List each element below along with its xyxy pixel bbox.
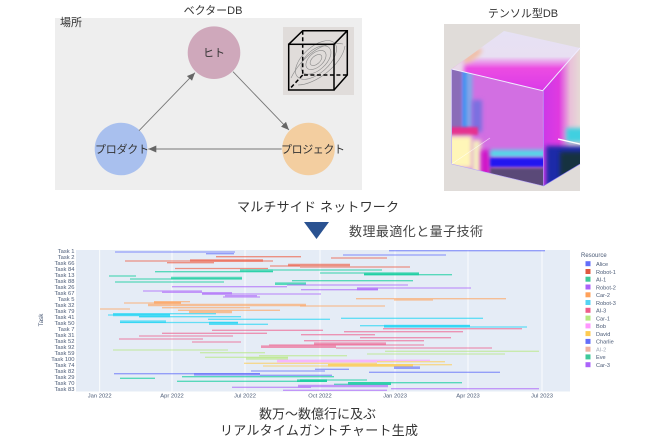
y axis task labels: Task 2 xyxy=(58,255,74,261)
x axis date labels: Oct 2022 xyxy=(308,394,332,400)
label: place: 場所 xyxy=(60,15,82,29)
y axis task labels: Task 1 xyxy=(58,249,74,255)
arrow: project to product xyxy=(148,148,282,150)
bars: Alice xyxy=(115,251,545,255)
y axis task labels: Task 29 xyxy=(55,375,74,381)
y axis task labels: Task 79 xyxy=(55,309,74,315)
y axis task labels: Task 13 xyxy=(55,273,74,279)
image: iridescent glass cube xyxy=(444,24,586,191)
y axis task labels xyxy=(51,249,75,393)
node: person: ヒト xyxy=(203,46,225,60)
text: mathematical optimisation and quantum technology: 数理最適化と量子技術 xyxy=(349,224,483,239)
bars: Robot-1 xyxy=(125,257,410,268)
legend: resource: AI-3 xyxy=(596,309,606,315)
node: project xyxy=(281,123,345,175)
bars: Car-1 xyxy=(113,350,539,358)
chart: gantt xyxy=(38,249,616,400)
bars: Car-3 xyxy=(232,386,539,390)
legend: resource xyxy=(581,253,616,369)
x axis date labels: Jan 2022 xyxy=(88,394,112,400)
x axis date labels: Jul 2023 xyxy=(531,394,553,400)
legend: resource: Robot-1 xyxy=(596,270,616,276)
y axis task labels: Task 5 xyxy=(58,297,74,303)
cube right face xyxy=(542,52,580,186)
bars: Car-2 xyxy=(100,299,506,312)
legend: resource: Alice xyxy=(596,262,608,268)
node: product: プロダクト xyxy=(95,142,149,156)
y axis task labels: Task 59 xyxy=(55,351,74,357)
y axis task labels: Task 50 xyxy=(55,321,74,327)
y axis task labels: Task 100 xyxy=(51,357,74,363)
bars: Bob xyxy=(277,360,430,362)
arrow: down triangle xyxy=(304,222,329,239)
bars: AI-3 xyxy=(119,329,522,348)
cube top face xyxy=(452,31,579,90)
y axis task labels: Task 70 xyxy=(55,381,74,387)
y axis task labels: Task 66 xyxy=(55,261,74,267)
panel: vector DB graph xyxy=(55,15,362,190)
legend: resource: Car-1 xyxy=(596,316,610,322)
caption: scale xyxy=(220,406,418,438)
legend: resource: Bob xyxy=(596,324,606,330)
legend: resource: Charlie xyxy=(596,340,614,346)
x axis date labels: Apr 2023 xyxy=(456,394,480,400)
legend: resource: Eve xyxy=(596,355,606,361)
caption: realtime gantt generation: リアルタイムガントチャート生成 xyxy=(220,423,418,438)
arrow: product to person xyxy=(139,73,195,131)
x axis date labels: Jul 2022 xyxy=(234,394,256,400)
y axis task labels: Task 32 xyxy=(55,303,74,309)
cube front face xyxy=(452,70,543,186)
y axis task labels: Task 7 xyxy=(58,327,74,333)
bars: Robot-2 xyxy=(143,285,471,297)
bars: David xyxy=(244,362,452,366)
y axis task labels: Task 26 xyxy=(55,285,74,291)
legend: resource: Resource xyxy=(581,253,607,259)
bars: Robot-3 xyxy=(108,314,527,327)
node: project: プロジェクト xyxy=(281,143,345,156)
y axis task labels: Task 88 xyxy=(55,279,74,285)
y axis task labels: Task 67 xyxy=(55,291,74,297)
node: product xyxy=(95,123,149,175)
title: vector DB: ベクターDB xyxy=(184,4,242,17)
y axis task labels: Task 83 xyxy=(55,387,74,393)
bars: Eve xyxy=(120,377,462,384)
y axis task labels: Task 82 xyxy=(55,369,74,375)
x axis date labels: Jan 2023 xyxy=(383,394,407,400)
y axis task labels: Task 41 xyxy=(55,315,74,321)
legend: resource: Car-3 xyxy=(596,363,610,369)
bars: AI-1 xyxy=(109,270,452,284)
y axis task labels: Task 52 xyxy=(55,339,74,345)
icon: wireframe cube with contours xyxy=(283,27,354,95)
legend: resource: Car-2 xyxy=(596,293,610,299)
legend: resource: AI-1 xyxy=(596,278,606,284)
legend: resource: Robot-2 xyxy=(596,285,616,291)
arrow: person to project xyxy=(233,72,289,130)
title: tensor DB: テンソル型DB xyxy=(488,6,558,20)
caption: scale: 数万〜数億行に及ぶ xyxy=(259,406,376,422)
y axis task labels: Task 92 xyxy=(55,345,74,351)
cube highlights xyxy=(452,48,580,186)
node: person xyxy=(188,26,240,79)
y axis task labels: Task 84 xyxy=(55,267,75,273)
x axis date labels: Apr 2022 xyxy=(160,394,184,400)
legend: resource: David xyxy=(596,332,610,338)
y axis task labels: Task 31 xyxy=(55,333,74,339)
x axis date labels xyxy=(88,394,553,400)
y axis task labels: Task 74 xyxy=(55,363,75,369)
legend: resource: AI-2 xyxy=(596,348,606,354)
legend: resource: Robot-3 xyxy=(596,301,616,307)
bars: Charlie xyxy=(114,368,500,375)
heading: multi-side network: マルチサイド ネットワーク xyxy=(237,200,399,214)
y axis title: Task xyxy=(38,313,45,326)
gantt bars xyxy=(100,251,545,390)
